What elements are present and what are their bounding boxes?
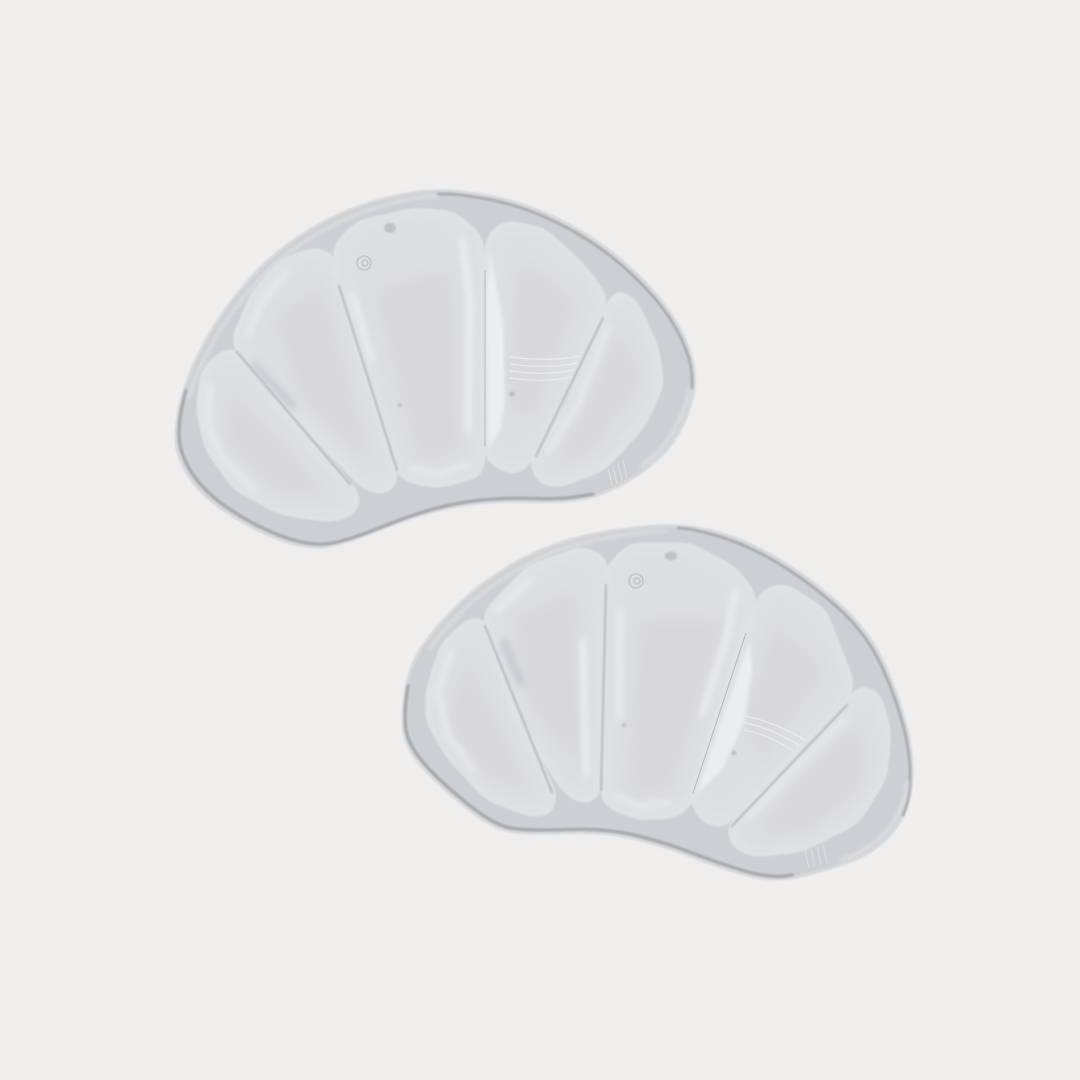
thin seam (693, 633, 746, 793)
pad 2 toe cushion 4 (692, 585, 853, 828)
air bubble (665, 552, 677, 560)
pad 2 cushion separators (485, 585, 847, 826)
pad 2 toe cushion 3 with mould mark (602, 545, 755, 818)
thin seam (484, 270, 486, 447)
pad 2 toe cushion 5 (729, 687, 889, 855)
pad 2 crease lines (805, 845, 827, 868)
pad 1 toe cushion 5 (531, 290, 662, 486)
pad 2 outer rim (403, 526, 912, 879)
mould ring (629, 574, 643, 588)
pad 1 toe cushion 1 (198, 350, 358, 520)
bright refraction band (696, 640, 752, 795)
pad 1 toe cushion 2 (233, 249, 397, 492)
pad 1 rim shading (179, 194, 692, 544)
gel pad: lower right (403, 526, 912, 879)
pad 1 crease lines (608, 460, 627, 486)
ridges (510, 356, 580, 380)
pad 2 toe cushion 2 (486, 548, 608, 803)
pad 2 toe cushion 1 (428, 618, 555, 815)
ridges (744, 716, 805, 752)
pad 1 outer rim (176, 191, 695, 547)
air bubble (384, 223, 396, 233)
pad 1 toe cushion 3 with mould mark (335, 210, 485, 486)
gel pad: upper left (176, 191, 695, 547)
pad 2 rim shading (405, 528, 910, 876)
pad 1 cushion separators (237, 286, 603, 484)
bright refraction band (486, 250, 505, 450)
mould ring (357, 256, 371, 270)
pad 1 toe cushion 4 (485, 222, 606, 474)
